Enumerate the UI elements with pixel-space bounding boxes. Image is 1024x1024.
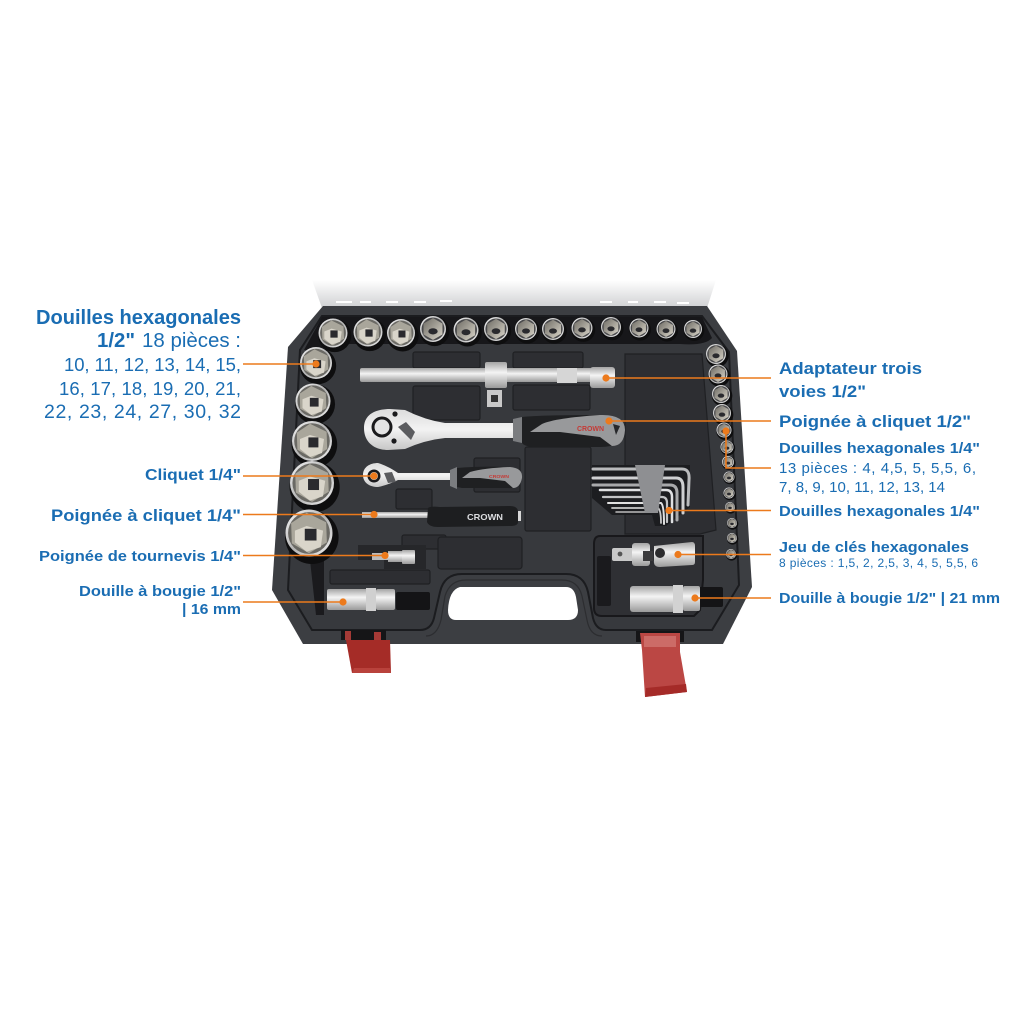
lower right compartment bbox=[594, 536, 703, 616]
small ratchet bbox=[363, 463, 522, 489]
callout: 1/4 inch sockets: Douilles hexagonales 1/4" bbox=[779, 441, 980, 457]
callout: screwdriver handle bbox=[39, 549, 389, 565]
callout: universal joint bbox=[674, 540, 978, 570]
callout: 1/4 inch sockets: 13 pièces : 4, 4,5, 5, 5,5, 6, bbox=[779, 460, 976, 477]
callout: 1/2 inch sockets: 16, 17, 18, 19, 20, 21, bbox=[59, 378, 241, 399]
right universal joint bbox=[612, 542, 695, 567]
callout: screwdriver-style ratchet handle bbox=[51, 506, 378, 525]
big ratchet bbox=[364, 409, 625, 450]
callout: 1/2 inch sockets: 1/2" bbox=[97, 330, 135, 352]
left latch notch bbox=[341, 630, 386, 640]
small universal joint bbox=[372, 550, 415, 564]
callout: universal joint: Jeu de clés hexagonales bbox=[779, 540, 969, 556]
red latch right bbox=[640, 633, 687, 697]
1/2 inch sockets left column bbox=[285, 347, 340, 564]
hex key holder bbox=[635, 465, 665, 513]
hex key set bbox=[593, 465, 689, 524]
small joint well bbox=[358, 545, 426, 569]
callout: 21 mm spark plug socket: Douille à bougie 1/2" | 21 mm bbox=[779, 591, 1000, 607]
callout: 1/2 inch sockets: 22, 23, 24, 27, 30, 32 bbox=[44, 401, 241, 423]
right spark plug well bbox=[698, 587, 723, 607]
socket trough bbox=[304, 317, 712, 350]
callout: 1/2 inch sockets: 18 pièces : bbox=[142, 330, 241, 352]
callout: 1/2 inch sockets: Douilles hexagonales bbox=[36, 307, 241, 329]
callout: screwdriver handle: Poignée de tournevis 1/4" bbox=[39, 549, 241, 565]
big ratchet: CROWN bbox=[577, 424, 604, 433]
callout: three-way adapter: voies 1/2" bbox=[779, 382, 866, 401]
callout: 1/4 inch sockets: 7, 8, 9, 10, 11, 12, 13, 14 bbox=[779, 479, 945, 496]
left slot bbox=[310, 560, 324, 615]
right spark plug socket bbox=[630, 585, 700, 613]
case body bbox=[272, 306, 752, 644]
small ratchet: CROWN bbox=[489, 474, 510, 480]
callout: 16 mm spark plug socket: Douille à bougie 1/2" bbox=[79, 584, 241, 600]
callout: big ratchet handle bbox=[605, 412, 971, 431]
callout: three-way adapter bbox=[602, 359, 922, 401]
callout: 1/2 inch sockets: 10, 11, 12, 13, 14, 15, bbox=[64, 354, 241, 375]
three-way adapter T-handle bbox=[360, 362, 615, 407]
hex key pocket bbox=[592, 465, 690, 526]
inner tray bbox=[288, 316, 739, 630]
callout: hex key set: Douilles hexagonales 1/4" bbox=[779, 504, 980, 520]
screwdriver handle bbox=[362, 506, 521, 527]
callout: hex key set bbox=[665, 504, 980, 520]
left spark plug well bbox=[396, 592, 430, 610]
callout: three-way adapter: Adaptateur trois bbox=[779, 359, 922, 378]
callout: small ratchet: Cliquet 1/4" bbox=[145, 467, 241, 484]
callout: 1/4 inch sockets bbox=[722, 427, 980, 496]
callout: small ratchet bbox=[145, 467, 378, 484]
red latch left bbox=[345, 631, 391, 673]
screwdriver handle: CROWN bbox=[467, 512, 503, 522]
1/2 inch sockets top row bbox=[318, 316, 704, 352]
callout: big ratchet handle: Poignée à cliquet 1/2" bbox=[779, 412, 971, 431]
left spark plug socket bbox=[327, 588, 395, 611]
callout: screwdriver-style ratchet handle: Poignée à cliquet 1/4" bbox=[51, 506, 241, 525]
tray recesses bbox=[330, 352, 716, 584]
callout: 21 mm spark plug socket bbox=[691, 591, 1000, 607]
right latch notch bbox=[636, 631, 684, 642]
lower right slot bbox=[597, 556, 611, 606]
callout: universal joint: 8 pièces : 1,5, 2, 2,5, 3, 4, 5, 5,5, 6 bbox=[779, 556, 978, 570]
callout: 16 mm spark plug socket: | 16 mm bbox=[182, 602, 241, 618]
callout: 16 mm spark plug socket bbox=[79, 584, 347, 618]
handle hole bbox=[448, 587, 578, 620]
open lid bbox=[312, 280, 716, 308]
handle contour bbox=[426, 580, 602, 636]
1/4 inch sockets right column bbox=[706, 344, 738, 561]
callout: 1/2 inch sockets bbox=[36, 307, 320, 423]
